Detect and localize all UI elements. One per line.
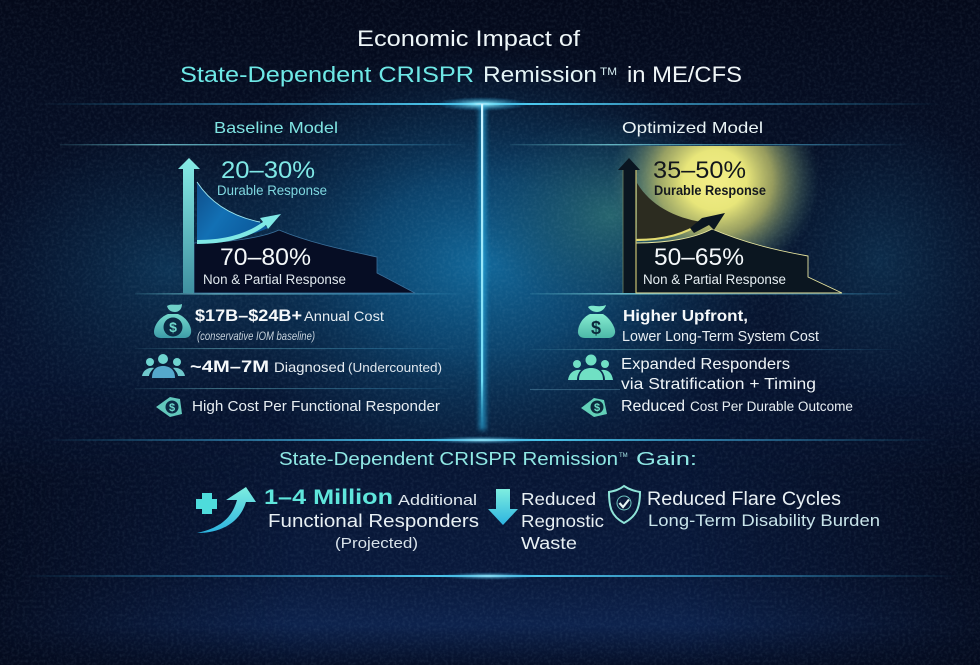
reduced regnostic waste: Regnostic xyxy=(521,511,604,531)
optimized heading: Optimized Model xyxy=(622,120,763,137)
bottom divider xyxy=(20,572,960,580)
baseline response chart: Durable Response xyxy=(217,183,327,198)
gain heading: State-Dependent CRISPR Remission xyxy=(279,449,618,469)
top divider with flare xyxy=(40,97,940,111)
icon: plus xyxy=(196,493,217,514)
functional responders: (Projected) xyxy=(335,535,418,552)
higher upfront: Higher Upfront, xyxy=(623,308,748,325)
reduced cost: Cost Per Durable Outcome xyxy=(690,399,853,414)
icon: people xyxy=(142,354,185,378)
diagnosed: ~4M–7M xyxy=(190,357,269,376)
optimized response chart: 50–65% xyxy=(654,244,744,271)
title: in ME/CFS xyxy=(627,62,742,87)
baseline response chart xyxy=(178,157,415,293)
functional responders: 1–4 Million xyxy=(264,486,393,509)
icon: shield check xyxy=(609,486,640,523)
icon: money bag: $ xyxy=(169,319,177,335)
icon: cost tag: $ xyxy=(169,402,175,414)
reduced flare cycles: Long-Term Disability Burden xyxy=(648,512,880,530)
optimized response chart: 35–50% xyxy=(653,157,746,184)
expanded responders: Expanded Responders xyxy=(621,356,790,373)
vertical center divider xyxy=(479,104,486,430)
annual cost: Annual Cost xyxy=(304,308,384,324)
optimized response chart: Non & Partial Response xyxy=(643,272,786,287)
icon: cost tag xyxy=(581,398,607,417)
reduced cost: Reduced xyxy=(621,398,685,415)
baseline response chart: 20–30% xyxy=(221,157,315,184)
middle divider xyxy=(40,436,940,444)
icon: money bag: $ xyxy=(591,318,601,338)
gain heading: TM xyxy=(619,453,628,459)
icon: cost tag: $ xyxy=(594,402,600,414)
optimized response chart xyxy=(618,157,842,293)
title xyxy=(180,26,742,87)
gain heading: Gain: xyxy=(636,449,697,469)
diagnosed: Diagnosed xyxy=(274,359,345,375)
reduced cost xyxy=(621,398,853,415)
diagnosed: (Undercounted) xyxy=(348,360,442,375)
title: TM xyxy=(600,66,617,78)
title: Economic Impact of xyxy=(357,26,581,51)
optimized response chart: Durable Response xyxy=(654,183,766,198)
functional responders: Additional xyxy=(398,492,477,509)
annual cost: (conservative IOM baseline) xyxy=(197,329,315,343)
reduced regnostic waste: Reduced xyxy=(521,489,596,509)
icon: money bag xyxy=(154,304,191,338)
expanded responders xyxy=(621,356,816,393)
baseline response chart: Non & Partial Response xyxy=(203,272,346,287)
reduced regnostic waste xyxy=(521,489,604,553)
functional responders xyxy=(264,486,479,552)
icon: cost tag xyxy=(156,397,182,417)
icon: rising arrow xyxy=(197,487,256,533)
higher upfront: Lower Long-Term System Cost xyxy=(622,329,819,345)
icon: money bag xyxy=(578,305,615,338)
icon: down arrow xyxy=(488,489,518,525)
diagnosed xyxy=(190,357,442,376)
annual cost xyxy=(195,306,384,343)
baseline heading: Baseline Model xyxy=(214,120,338,137)
reduced flare cycles xyxy=(647,489,880,530)
panel: gain xyxy=(196,449,880,553)
title: State-Dependent CRISPR xyxy=(180,62,474,87)
reduced flare cycles: Reduced Flare Cycles xyxy=(647,489,841,510)
baseline response chart: 70–80% xyxy=(220,244,311,271)
expanded responders: via Stratification + Timing xyxy=(621,376,816,393)
higher upfront xyxy=(622,308,819,345)
panel: baseline model xyxy=(60,120,470,417)
yellow glow xyxy=(610,146,820,293)
icon: people xyxy=(568,354,613,380)
high cost per responder: High Cost Per Functional Responder xyxy=(192,399,440,415)
panel: optimized model xyxy=(510,120,910,417)
annual cost: $17B–$24B+ xyxy=(195,306,302,325)
title: Remission xyxy=(483,62,597,87)
reduced regnostic waste: Waste xyxy=(521,533,577,553)
functional responders: Functional Responders xyxy=(268,511,479,531)
